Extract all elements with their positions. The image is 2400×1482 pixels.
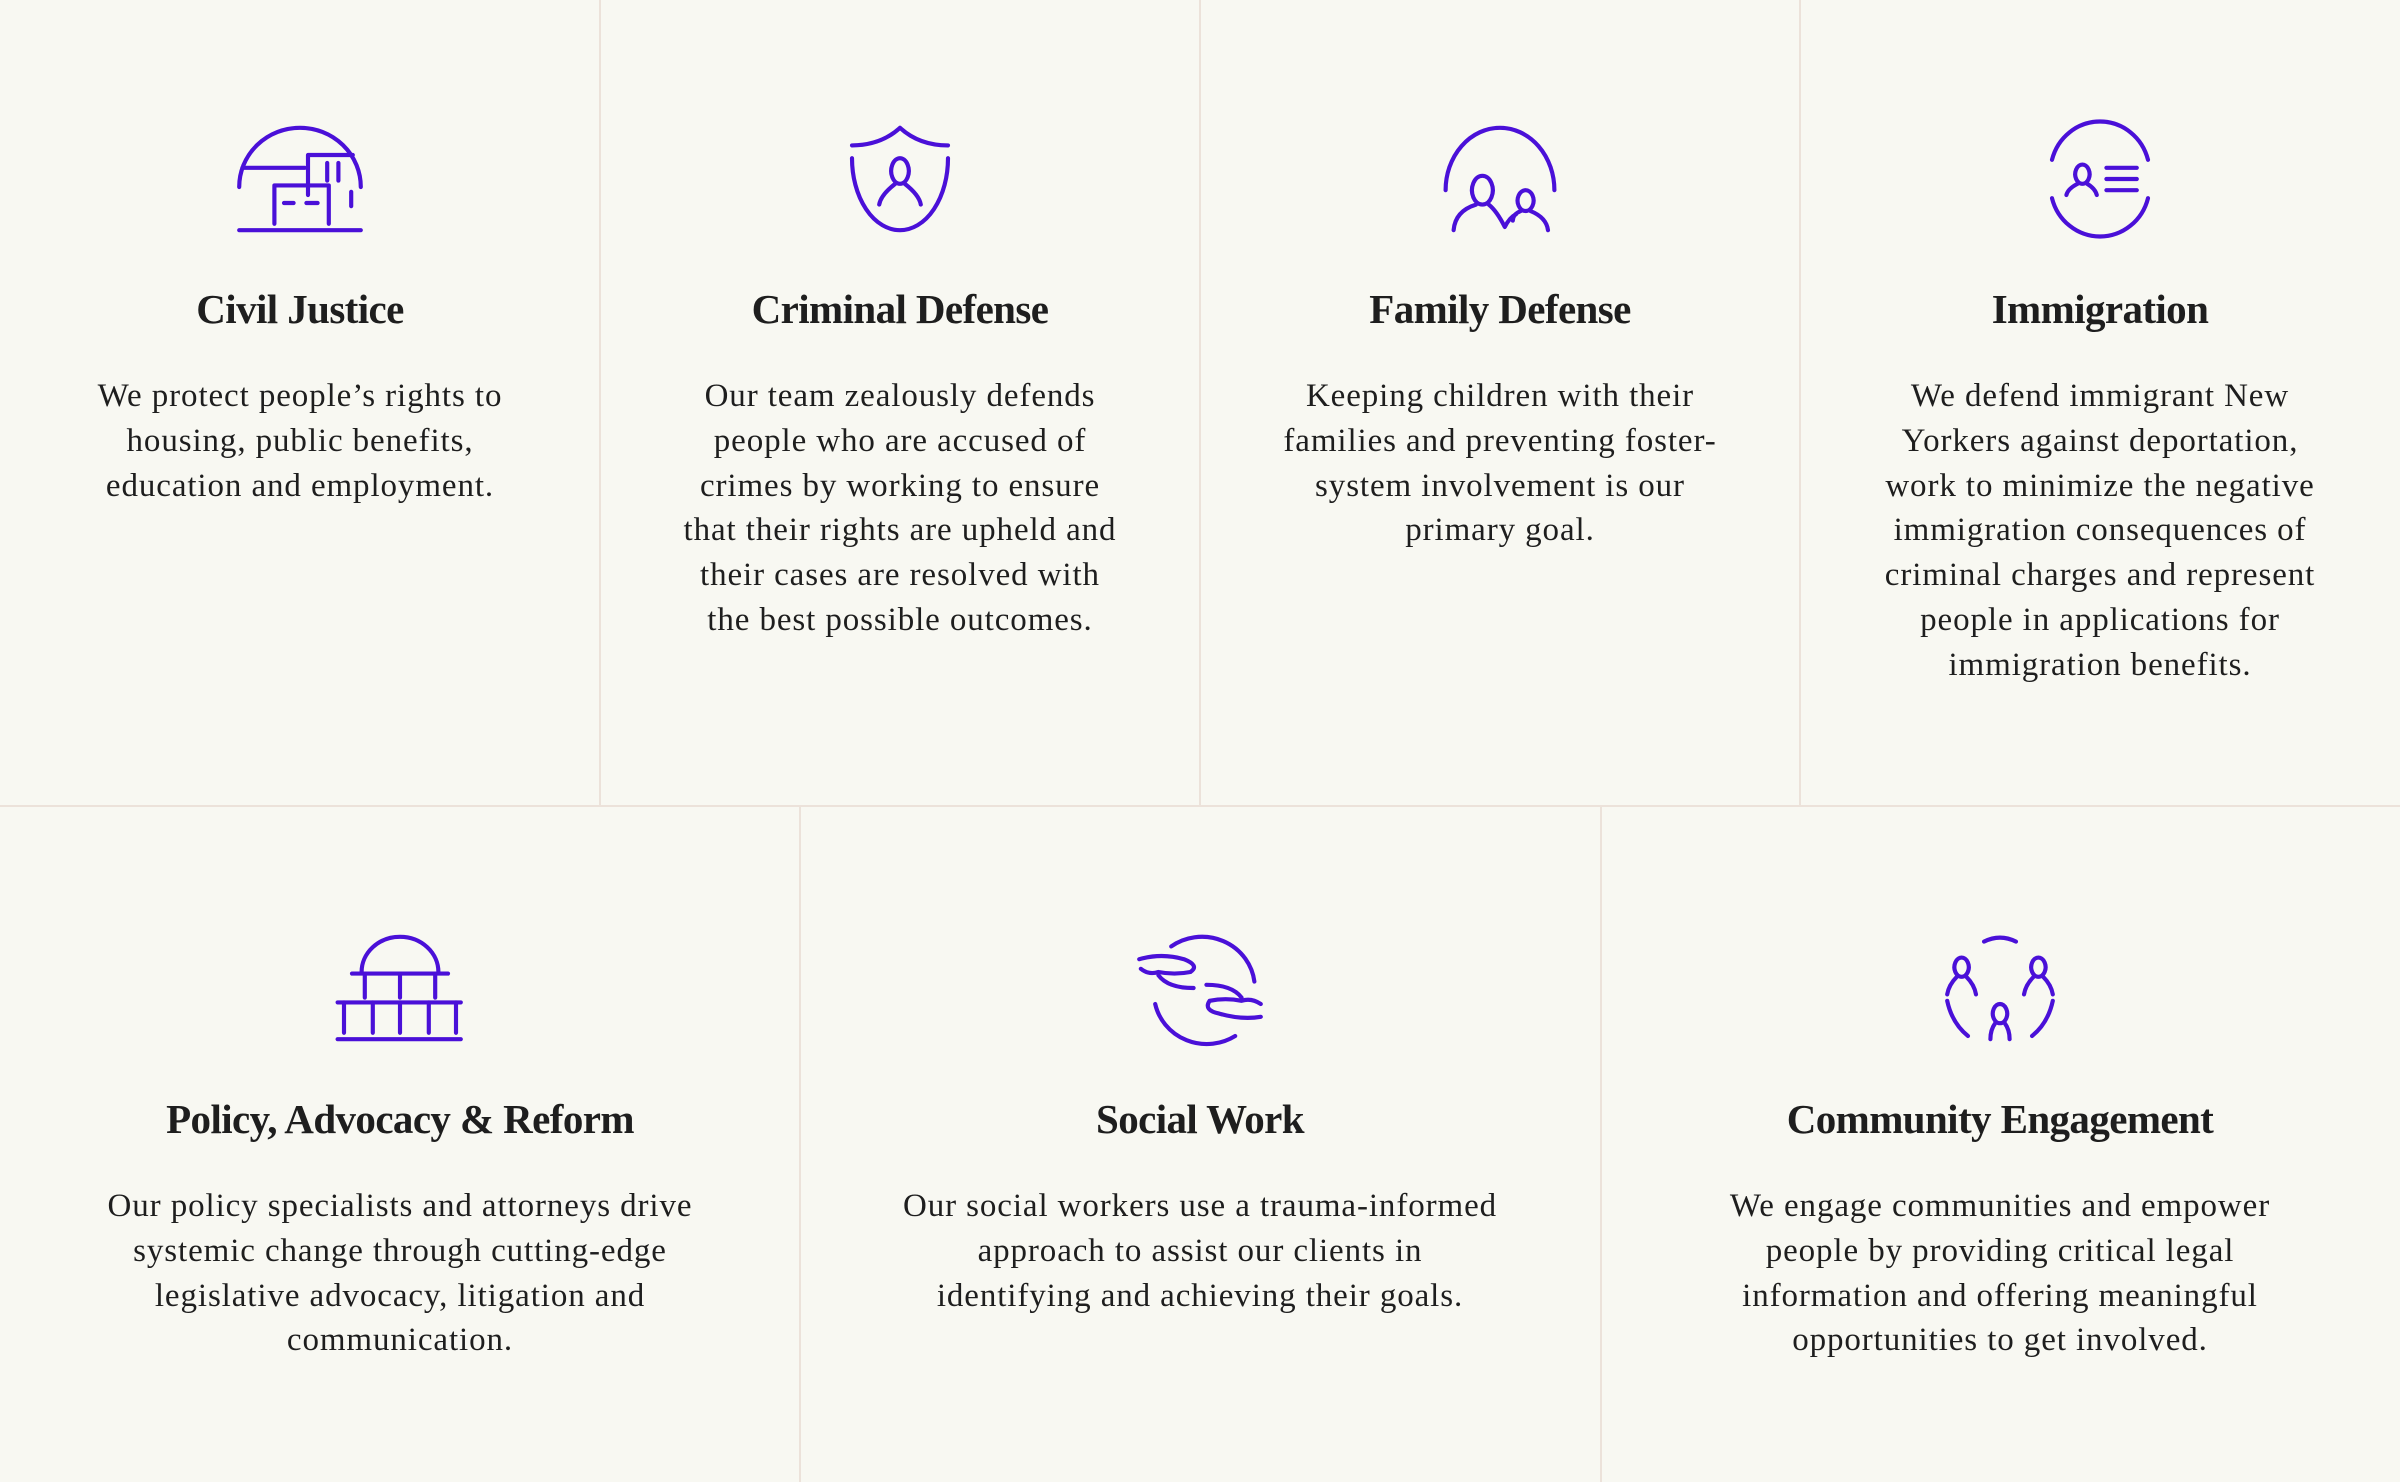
body text	[1885, 378, 2315, 683]
icon: capitol	[336, 934, 463, 1042]
body text: immigration benefits.	[1948, 647, 2252, 683]
body text: approach to assist our clients in	[978, 1233, 1422, 1269]
body text: Our team zealously defends	[705, 378, 1095, 414]
body text: legislative advocacy, litigation and	[155, 1278, 645, 1314]
body text: education and employment.	[106, 468, 494, 504]
body text	[684, 378, 1116, 638]
body text	[903, 1188, 1497, 1314]
icon: building dome	[237, 126, 363, 232]
body text: system involvement is our	[1315, 468, 1685, 504]
body text: people in applications for	[1920, 602, 2280, 638]
body text: Our policy specialists and attorneys drive	[108, 1188, 692, 1224]
body text: their cases are resolved with	[700, 557, 1100, 593]
panel: social work	[903, 934, 1497, 1314]
body text: Our social workers use a trauma-informed	[903, 1188, 1497, 1224]
body text: We protect people’s rights to	[98, 378, 502, 414]
body text	[1283, 378, 1717, 548]
panel: immigration	[1885, 119, 2315, 683]
body text: communication.	[287, 1322, 513, 1358]
title: Civil Justice	[196, 286, 404, 332]
body text: housing, public benefits,	[127, 423, 473, 459]
icon: id card circle	[2050, 119, 2150, 239]
panel: civil justice	[98, 126, 502, 504]
body text: crimes by working to ensure	[700, 468, 1100, 504]
body text: Yorkers against deportation,	[1902, 423, 2298, 459]
icon: hands	[1137, 934, 1263, 1046]
body text: identifying and achieving their goals.	[937, 1278, 1463, 1314]
body text: information and offering meaningful	[1742, 1278, 2258, 1314]
icon: family	[1444, 126, 1556, 232]
body text: primary goal.	[1405, 512, 1595, 548]
body text: work to minimize the negative	[1885, 468, 2315, 504]
body text: immigration consequences of	[1894, 512, 2306, 548]
body text	[1730, 1188, 2270, 1358]
title: Community Engagement	[1787, 1096, 2213, 1142]
body text: We engage communities and empower	[1730, 1188, 2270, 1224]
panel: community engagement	[1730, 936, 2270, 1358]
body text: systemic change through cutting-edge	[133, 1233, 667, 1269]
panel: criminal defense	[684, 126, 1116, 638]
body text: that their rights are upheld and	[684, 512, 1116, 548]
body text: families and preventing foster-	[1283, 423, 1717, 459]
body text: people who are accused of	[714, 423, 1086, 459]
body text: opportunities to get involved.	[1792, 1322, 2208, 1358]
body text	[98, 378, 502, 504]
body text: people by providing critical legal	[1766, 1233, 2234, 1269]
body text: Keeping children with their	[1306, 378, 1694, 414]
body text	[108, 1188, 692, 1358]
title: Social Work	[1096, 1096, 1304, 1142]
body text: criminal charges and represent	[1885, 557, 2315, 593]
icon: community circle	[1945, 936, 2055, 1042]
title: Immigration	[1992, 286, 2208, 332]
icon: shield person	[850, 126, 950, 232]
body text: the best possible outcomes.	[707, 602, 1093, 638]
title: Criminal Defense	[752, 286, 1048, 332]
body text: We defend immigrant New	[1911, 378, 2289, 414]
title: Policy, Advocacy & Reform	[166, 1096, 634, 1142]
panel: policy	[108, 934, 692, 1358]
title: Family Defense	[1369, 286, 1631, 332]
panel: family defense	[1283, 126, 1717, 548]
